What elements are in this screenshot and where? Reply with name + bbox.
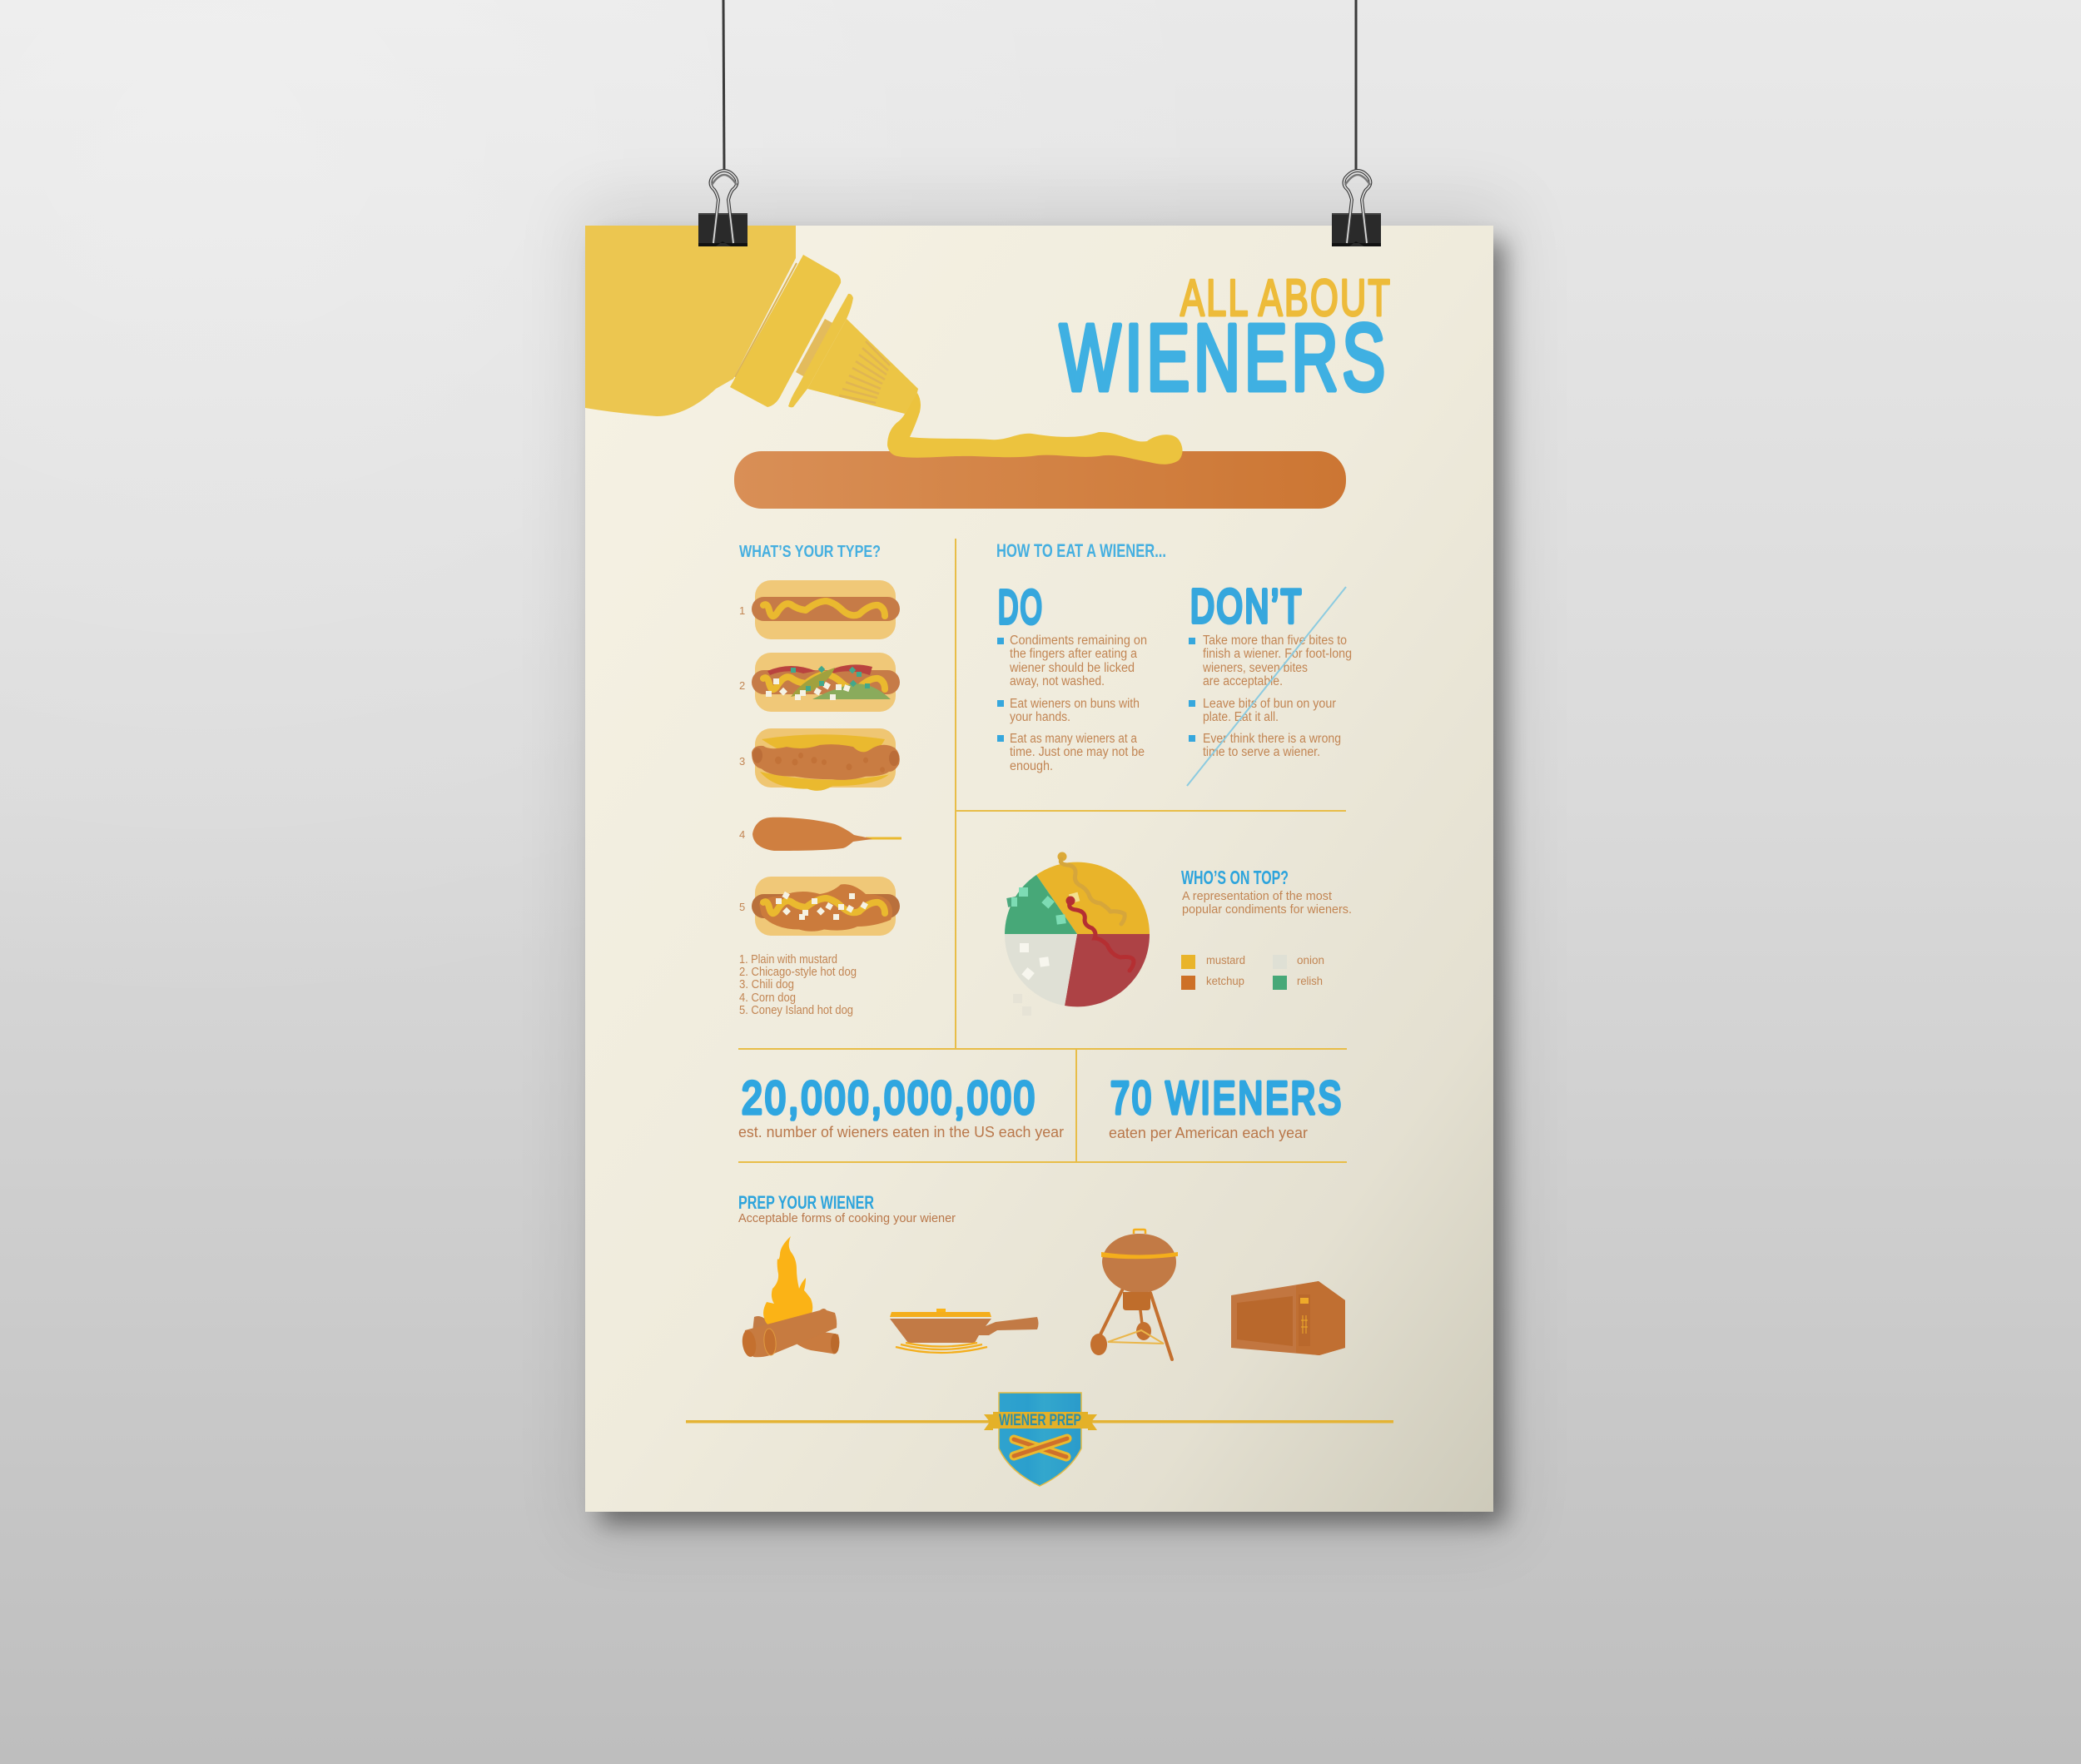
type numbers: 4 (739, 828, 745, 841)
do list: away, not washed. (1010, 674, 1105, 688)
don't list: time to serve a wiener. (1203, 745, 1320, 759)
prep subheading: Acceptable forms of cooking your wiener (738, 1212, 956, 1225)
column dividers (738, 539, 1347, 1162)
heading: how to eat a wiener: HOW TO EAT A WIENER... (996, 540, 1166, 561)
poster sheet (585, 226, 1493, 1512)
hot dog 5: coney island (752, 877, 900, 936)
hot dog 3: chili dog (752, 728, 900, 791)
don't list: finish a wiener. For foot-long (1203, 647, 1352, 661)
divider between body and cap (735, 263, 797, 377)
slice: mustard (1036, 862, 1150, 934)
do bullets (997, 638, 1004, 742)
relish squares (1006, 887, 1066, 925)
don't list: plate. Eat it all. (1203, 710, 1279, 724)
don't list: Take more than five bites to (1203, 634, 1347, 648)
strike-through line (1187, 587, 1346, 786)
shield (999, 1393, 1081, 1486)
heading: what's your type: WHAT’S YOUR TYPE? (739, 542, 881, 561)
don't list: Ever think there is a wrong (1203, 732, 1341, 746)
type key list (739, 952, 857, 1017)
don't list (1202, 634, 1352, 759)
stat: 70 wieners: 70 WIENERS (1110, 1072, 1343, 1124)
type key list: 3. Chili dog (739, 977, 794, 991)
crossed wieners (1014, 1439, 1067, 1457)
type numbers: 5 (739, 901, 745, 913)
badge text: WIENER PREP (999, 1412, 1081, 1429)
mustard squiggle (1057, 852, 1125, 924)
panel: who's on top (1005, 852, 1352, 1016)
do list: time. Just one may not be (1010, 745, 1145, 759)
cap flange (788, 294, 853, 407)
hot dog 4: corn dog (752, 817, 901, 851)
title line: all about: ALL ABOUT (1180, 270, 1392, 327)
do list: Eat wieners on buns with (1010, 697, 1140, 711)
type numbers: 2 (739, 679, 745, 692)
footer rule (686, 1420, 1393, 1424)
bottle body (585, 226, 796, 416)
poster shadow (579, 204, 1511, 1536)
do list (1009, 634, 1147, 773)
legend: relish (1297, 975, 1323, 987)
mustard bottle (585, 226, 918, 416)
panel: what's your type (739, 542, 901, 1017)
fallen onion squares (1013, 994, 1031, 1016)
bottle nozzle (807, 319, 918, 414)
heading: don't: DON’T (1190, 579, 1304, 633)
heading: prep your wiener: PREP YOUR WIENER (738, 1192, 874, 1213)
type key list: 5. Coney Island hot dog (739, 1003, 853, 1017)
legend (1181, 954, 1324, 990)
heading: who's on top: WHO’S ON TOP? (1181, 867, 1289, 888)
type key list: 2. Chicago-style hot dog (739, 965, 857, 979)
do list: enough. (1010, 759, 1053, 773)
do list: Eat as many wieners at a (1010, 732, 1137, 746)
do list: Condiments remaining on (1010, 634, 1147, 648)
title (1060, 270, 1392, 410)
do list: wiener should be licked (1009, 661, 1135, 675)
nozzle neck (796, 319, 834, 377)
don't list: are acceptable. (1203, 674, 1283, 688)
heading: do: DO (998, 581, 1044, 634)
legend: onion (1297, 954, 1324, 966)
type numbers: 1 (739, 604, 745, 617)
legend: mustard (1206, 954, 1245, 966)
icon: microwave (1231, 1281, 1345, 1355)
stat: 20 billion: 20,000,000,000 (742, 1072, 1037, 1124)
don't bullets (1189, 638, 1195, 742)
mustard stream (887, 393, 1183, 465)
type numbers (739, 604, 745, 913)
pie description: popular condiments for wieners. (1182, 902, 1352, 917)
slice: relish (1005, 875, 1077, 934)
icon: kettle grill (1090, 1230, 1178, 1359)
stat caption: 20 billion: est. number of wieners eaten in the US each year (738, 1123, 1064, 1140)
binder clip right (1332, 171, 1381, 246)
legend: ketchup (1206, 975, 1244, 987)
slice: ketchup (1065, 934, 1150, 1006)
bottle cap (730, 255, 841, 407)
type key list: 4. Corn dog (739, 991, 796, 1005)
mustard square (1069, 892, 1080, 903)
ketchup squiggle (1065, 896, 1134, 971)
hero hot dog bun (734, 451, 1346, 509)
stat caption: 70 wieners: eaten per American each year (1109, 1124, 1308, 1141)
slice: onion (1005, 934, 1077, 1006)
panel: how to eat (996, 540, 1352, 786)
pie chart (1005, 852, 1150, 1016)
banner (984, 1412, 1097, 1430)
nozzle ridges (839, 341, 890, 403)
type key list: 1. Plain with mustard (739, 952, 837, 966)
badge: wiener prep (984, 1393, 1097, 1486)
binder clip left (698, 171, 747, 246)
title line: wieners: WIENERS (1060, 305, 1389, 410)
hot dog 2: chicago style (752, 653, 900, 712)
type numbers: 3 (739, 755, 745, 768)
icon: campfire (741, 1236, 839, 1358)
hanging wires (723, 0, 1356, 172)
icon: frying pan (890, 1309, 1039, 1353)
don't list: wieners, seven bites (1202, 661, 1308, 675)
do list: your hands. (1010, 710, 1070, 724)
panel: statistics (738, 1072, 1343, 1141)
onion squares (1020, 943, 1050, 980)
don't list: Leave bits of bun on your (1203, 697, 1336, 711)
panel: prep your wiener (738, 1192, 1345, 1359)
pie description (1182, 889, 1352, 917)
do list: the fingers after eating a (1010, 647, 1137, 661)
hot dog 1: plain with mustard (752, 580, 900, 639)
pie description: A representation of the most (1182, 889, 1333, 903)
